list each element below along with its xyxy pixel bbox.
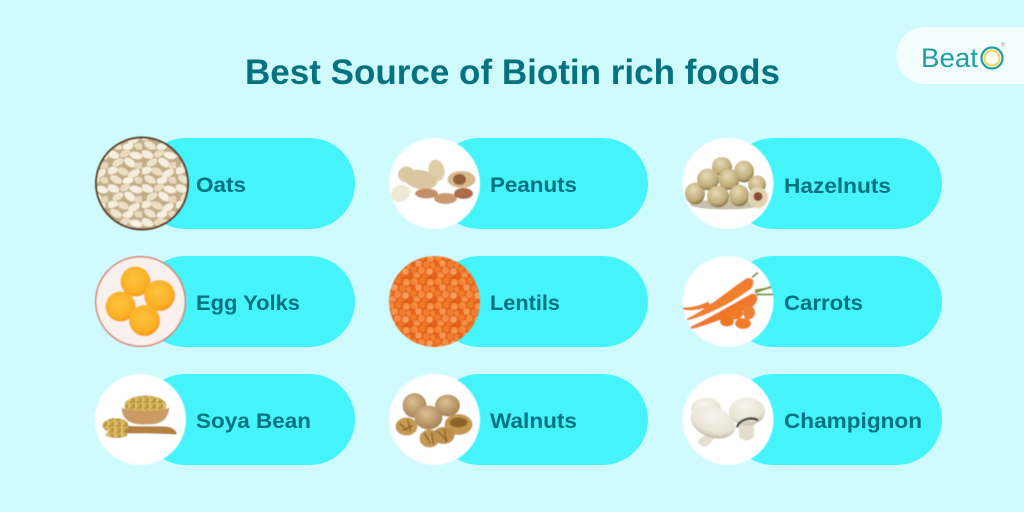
icon: oats bowl <box>95 136 189 230</box>
icon: hazelnuts <box>682 138 774 229</box>
logo: BeatO: Beat <box>921 43 979 73</box>
icon: soya bean bowl <box>95 374 186 465</box>
label: Soya Bean: Soya Bean <box>196 409 311 433</box>
card: Oats <box>95 136 355 230</box>
label: Lentils: Lentils <box>490 291 560 315</box>
title: Best Source of Biotin rich foods <box>245 53 780 92</box>
card: Walnuts <box>389 374 648 465</box>
icon: walnuts <box>389 374 480 465</box>
icon: lentils <box>389 256 480 347</box>
label: Oats: Oats <box>196 173 246 197</box>
label: Walnuts: Walnuts <box>490 409 577 433</box>
card: Hazelnuts <box>682 138 942 229</box>
icon: carrots <box>682 256 774 347</box>
card: Egg Yolks <box>96 256 355 347</box>
icon: peanuts <box>388 138 480 229</box>
card: Champignon <box>682 374 942 465</box>
card: Peanuts <box>388 138 648 229</box>
logo: BeatO: ® <box>1001 42 1006 49</box>
card: Carrots <box>682 256 942 347</box>
label: Egg Yolks: Egg Yolks <box>196 291 300 315</box>
label: Carrots: Carrots <box>784 291 863 315</box>
logo: BeatO <box>897 27 1024 84</box>
icon: champignon mushrooms <box>682 374 774 465</box>
label: Champignon: Champignon <box>784 409 922 433</box>
card: Soya Bean <box>95 374 355 465</box>
icon: egg yolks <box>96 257 185 346</box>
label: Hazelnuts: Hazelnuts <box>784 174 891 198</box>
label: Peanuts: Peanuts <box>490 173 577 197</box>
card: Lentils <box>389 256 648 347</box>
